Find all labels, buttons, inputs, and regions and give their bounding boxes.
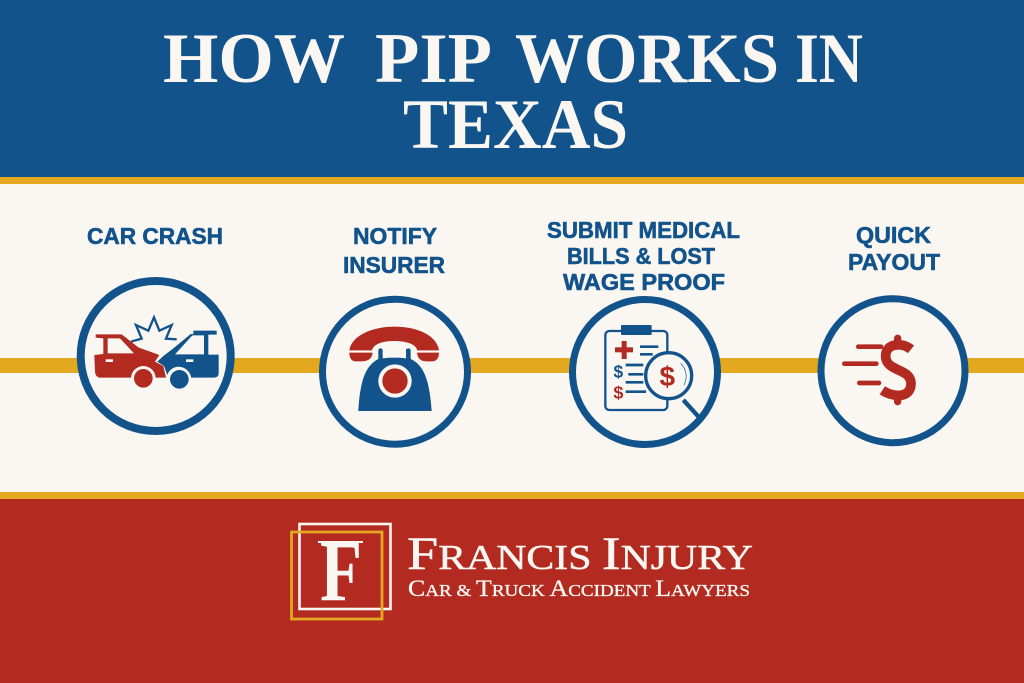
panel: cream body — [0, 184, 1024, 492]
icon: clipboard with magnifier: $ — [613, 383, 623, 403]
heading: quick payout: QUICK — [856, 222, 931, 248]
title: PIP — [375, 20, 492, 98]
logo mark: F in squares: F — [320, 523, 362, 620]
heading: submit medical bills: BILLS & LOST — [567, 243, 715, 269]
heading: quick payout — [848, 222, 940, 275]
step 4: quick payout — [821, 222, 965, 443]
panel: red footer — [0, 499, 1024, 683]
heading: notify insurer: INSURER — [343, 252, 445, 278]
title: TEXAS — [403, 86, 628, 164]
step 1: car crash — [81, 223, 231, 431]
title — [163, 20, 863, 164]
panel: blue header — [0, 0, 1024, 177]
icon: clipboard with magnifier: $ — [660, 361, 676, 392]
heading: quick payout: PAYOUT — [848, 249, 940, 275]
heading: car crash: CAR CRASH — [87, 223, 223, 249]
icon: clipboard with magnifier — [605, 325, 700, 418]
wordmark: tagline: CAR & TRUCK ACCIDENT LAWYERS — [408, 576, 750, 601]
circle: submit documents — [572, 300, 718, 444]
step 2: notify insurer — [322, 223, 468, 444]
logo mark: F in squares — [292, 523, 390, 620]
heading: notify insurer: NOTIFY — [353, 223, 437, 249]
icon: telephone — [349, 327, 439, 411]
heading: submit medical bills — [547, 217, 740, 295]
title: HOW — [163, 20, 345, 98]
heading: submit medical bills: WAGE PROOF — [563, 269, 725, 295]
wordmark: firm name: FRANCIS INJURY — [407, 528, 753, 580]
circle: notify insurer — [322, 299, 468, 444]
icon: clipboard with magnifier: $ — [614, 361, 624, 381]
icon: speeding dollar sign — [844, 338, 911, 402]
step 3: submit medical bills and lost wage proof — [547, 217, 740, 444]
title: WORKS — [515, 20, 779, 98]
heading: submit medical bills: SUBMIT MEDICAL — [547, 217, 740, 243]
circle: car crash — [81, 281, 231, 431]
heading: notify insurer — [343, 223, 445, 278]
icon: two cars colliding — [94, 317, 219, 391]
circle: quick payout — [821, 299, 965, 443]
logo: Francis Injury — [292, 523, 753, 620]
title: IN — [795, 20, 863, 98]
